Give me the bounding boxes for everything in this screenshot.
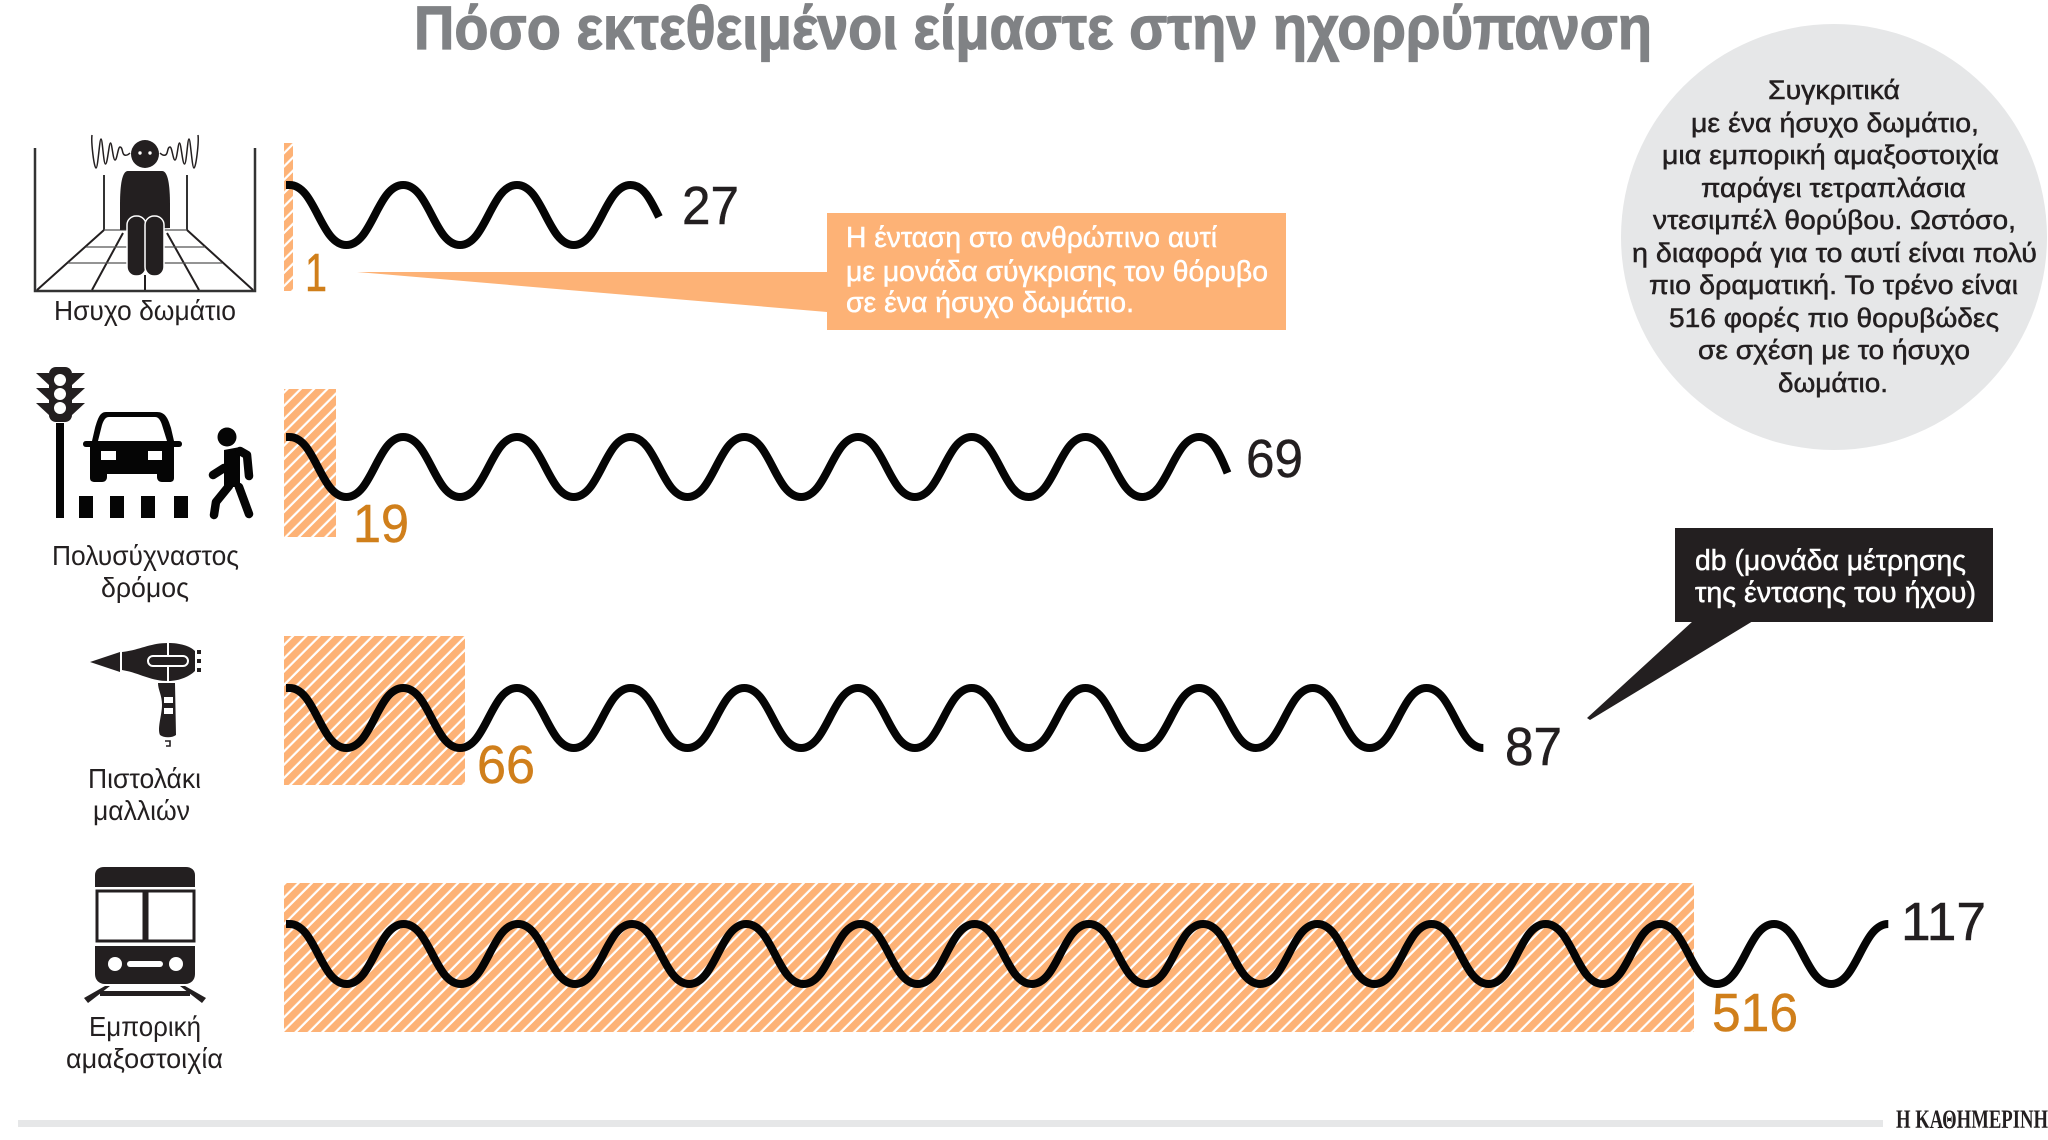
panel: comparison circle: με ένα ήσυχο δωμάτιο, — [1691, 108, 1979, 138]
wave: freight train — [286, 924, 1888, 984]
label: hair dryer: μαλλιών — [93, 795, 190, 826]
panel: comparison circle: δωμάτιο. — [1778, 368, 1888, 398]
panel: comparison circle — [1621, 24, 2047, 450]
label: freight train: Εμπορική — [89, 1011, 201, 1042]
wave: busy road — [286, 437, 1227, 497]
callout: perceived intensity: με μονάδα σύγκρισης τον θόρυβο — [846, 256, 1268, 288]
label: hair dryer: Πιστολάκι — [88, 763, 201, 794]
value: 1: 1 — [305, 243, 327, 303]
bar: busy road — [284, 389, 336, 537]
panel: comparison circle: μια εμπορική αμαξοστοιχία — [1662, 140, 1999, 170]
value: 19: 19 — [353, 494, 409, 554]
bar: hair dryer — [284, 636, 465, 785]
callout: perceived intensity — [357, 213, 1286, 330]
bar: quiet room — [284, 143, 293, 291]
label: busy road: δρόμος — [101, 572, 189, 603]
callout: perceived intensity: σε ένα ήσυχο δωμάτιο. — [846, 287, 1134, 319]
bar: freight train — [284, 883, 1694, 1032]
value: 66: 66 — [477, 735, 535, 795]
callout: decibel definition: db (μονάδα μέτρησης — [1695, 545, 1966, 577]
label: freight train — [66, 1011, 223, 1074]
footer rule — [18, 1120, 1883, 1127]
value: 27 dB: 27 — [682, 176, 739, 236]
icon: person in quiet room — [35, 135, 255, 291]
callout: decibel definition: της έντασης του ήχου) — [1695, 577, 1976, 609]
label: hair dryer — [88, 763, 201, 826]
label: busy road: Πολυσύχναστος — [52, 540, 239, 571]
panel: comparison circle: η διαφορά για το αυτί είναι πολύ — [1632, 238, 2037, 268]
label: freight train: αμαξοστοιχία — [66, 1043, 223, 1074]
icon: train — [84, 867, 206, 1003]
value: 87 dB: 87 — [1505, 717, 1562, 777]
callout: decibel definition — [1587, 528, 1993, 720]
panel: comparison circle: σε σχέση με το ήσυχο — [1698, 335, 1970, 365]
wave: hair dryer — [286, 688, 1483, 748]
label: quiet room: Ησυχο δωμάτιο — [54, 295, 236, 326]
panel: comparison circle: πιο δραματική. Το τρένο είναι — [1649, 270, 2018, 300]
label: busy road — [52, 540, 239, 603]
panel: comparison circle: 516 φορές πιο θορυβώδες — [1669, 303, 1999, 333]
panel: comparison circle: παράγει τετραπλάσια — [1701, 173, 1966, 203]
callout: perceived intensity: Η ένταση στο ανθρώπινο αυτί — [846, 222, 1218, 254]
value: 69 dB: 69 — [1246, 429, 1303, 489]
icon: busy road — [36, 367, 249, 518]
value: 117 dB: 117 — [1901, 892, 1986, 952]
value: 516: 516 — [1712, 983, 1798, 1043]
icon: hair dryer — [90, 643, 201, 746]
panel: comparison circle: ντεσιμπέλ θορύβου. Ωστόσο, — [1653, 205, 2016, 235]
wave: quiet room — [286, 185, 659, 245]
panel: comparison circle: Συγκριτικά — [1768, 75, 1900, 105]
